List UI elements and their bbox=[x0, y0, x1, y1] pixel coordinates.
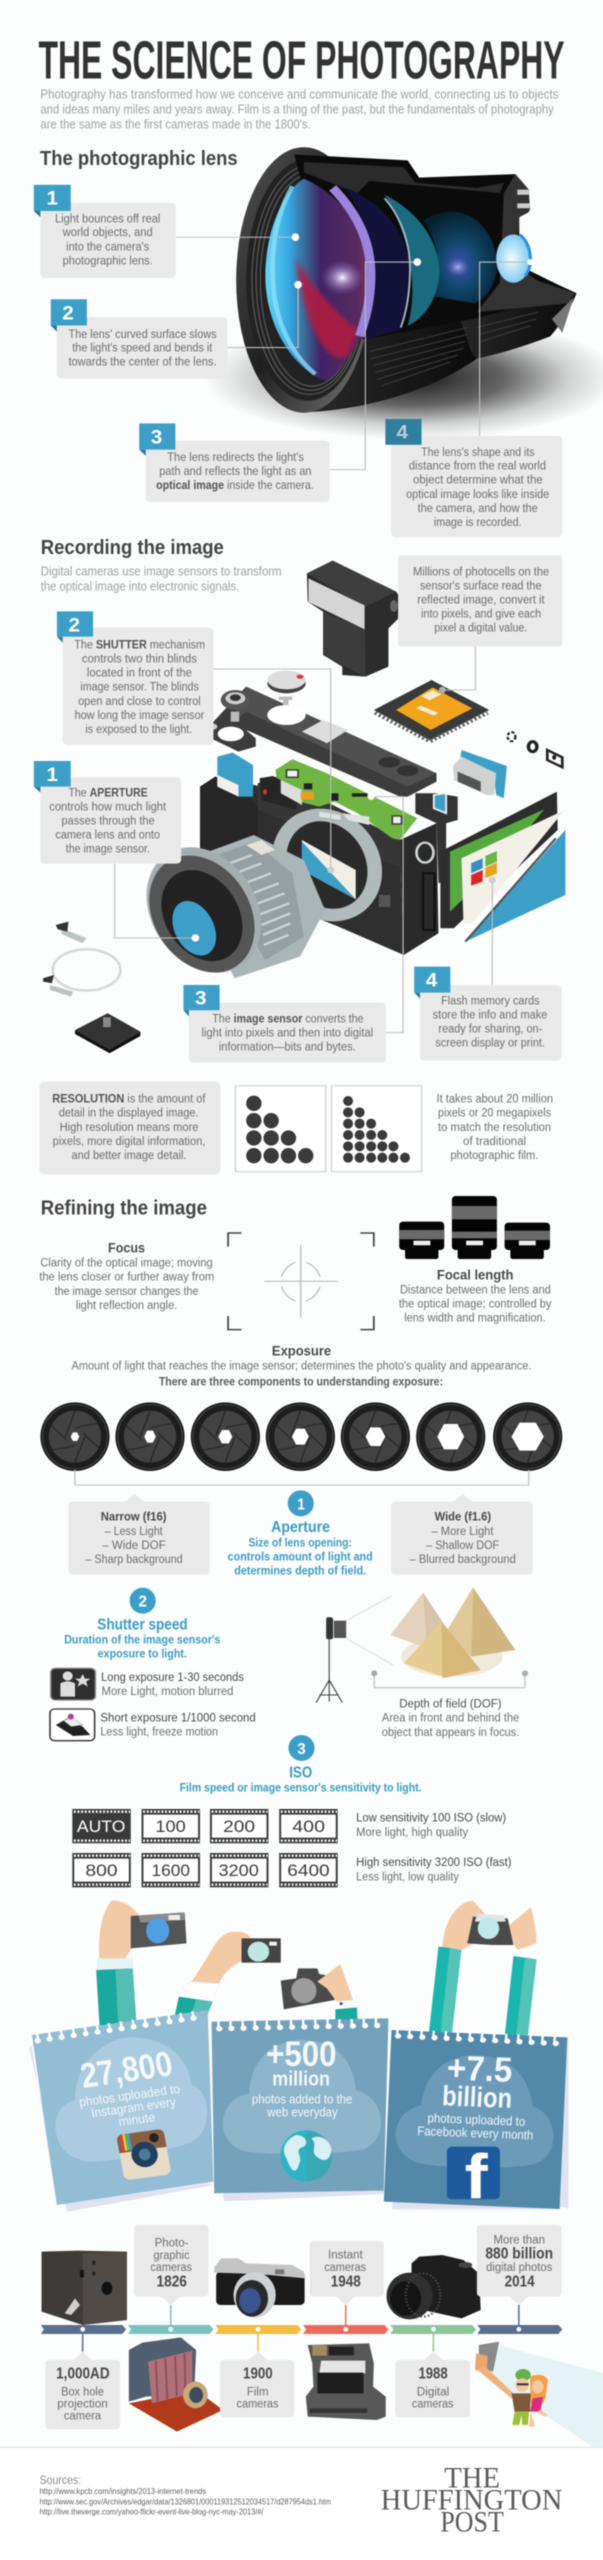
block: ISO definition: ISO bbox=[289, 1764, 312, 1781]
callout: 1900 bbox=[220, 2352, 294, 2417]
recording intro text bbox=[41, 565, 282, 594]
callout: 1826: Photo- bbox=[155, 2236, 188, 2249]
callout 2: shutter: image sensor. The blinds bbox=[80, 680, 199, 693]
chart: ISO film frames: 400 bbox=[292, 1817, 325, 1836]
callout 1: aperture: The APERTURE bbox=[68, 785, 148, 799]
text: megapixels note: pixels or 20 megapixels bbox=[438, 1106, 551, 1119]
callout 1: lens: into the camera's bbox=[66, 239, 150, 253]
marker dots: camera bbox=[192, 793, 496, 942]
panel: facebook statistic: billion bbox=[441, 2081, 513, 2114]
intro text: are the same as the first cameras made in the 1800's. bbox=[40, 116, 311, 131]
callout: 1900: cameras bbox=[237, 2397, 279, 2410]
block: ISO definition: 3 bbox=[297, 1739, 306, 1758]
callout: 1900: Film bbox=[247, 2384, 268, 2398]
callout 2: shutter: how long the image sensor bbox=[75, 708, 205, 722]
text block: focal length: the optical image; controlled by bbox=[399, 1296, 552, 1310]
callout 1: aperture: passes through the bbox=[62, 814, 155, 827]
callout: 1988: 1988 bbox=[418, 2364, 448, 2382]
text: depth of field: object that appears in focus. bbox=[382, 1725, 519, 1739]
lens illustration bbox=[204, 147, 603, 440]
lens shadow bbox=[204, 315, 603, 440]
icon: globe bbox=[280, 2130, 332, 2182]
illustration: hand with camera 1 bbox=[96, 1901, 187, 2033]
callout 1: aperture: 1 bbox=[47, 764, 58, 786]
chart: ISO film frames: 100 bbox=[155, 1817, 186, 1836]
chart: ISO film frames: 200 bbox=[223, 1817, 255, 1836]
icon: circuit board bbox=[260, 759, 417, 840]
panel: wide aperture: – Blurred background bbox=[410, 1552, 516, 1566]
chart: ISO film frames: 6400 bbox=[287, 1861, 330, 1880]
panel: narrow aperture: – Sharp background bbox=[85, 1552, 183, 1566]
panel: wide aperture bbox=[391, 1494, 533, 1574]
icon: image sensor chip bbox=[374, 680, 489, 741]
text: megapixels note: to match the resolution bbox=[438, 1120, 551, 1134]
block: shutter speed definition: Duration of the image sensor's bbox=[64, 1632, 220, 1646]
callout: 1000 AD: projection bbox=[57, 2397, 108, 2410]
panel: web statistic bbox=[212, 2018, 388, 2201]
text: long exposure bbox=[101, 1670, 244, 1698]
text: short exposure bbox=[100, 1711, 256, 1738]
panel: web statistic: +500 bbox=[266, 2035, 337, 2074]
illustration: hand with camera 3 bbox=[281, 1964, 358, 2022]
callout: 1826: cameras bbox=[150, 2260, 192, 2274]
callout 4: flash memory: 4 bbox=[426, 970, 438, 991]
callout: 2014: 2014 bbox=[505, 2273, 535, 2290]
icon: rear screen bbox=[440, 792, 565, 942]
illustration: selfie couple bbox=[475, 2342, 548, 2427]
block: aperture definition: Size of lens opening: bbox=[248, 1535, 352, 1549]
text block: exposure bbox=[72, 1344, 532, 1388]
callout: 2014: digital photos bbox=[486, 2260, 553, 2274]
callout: 1948: Instant bbox=[328, 2247, 363, 2261]
sources: http://www.kpcb.com/insights/2013-internet-trends bbox=[40, 2487, 206, 2496]
heading: recording the image: Recording the image bbox=[41, 535, 224, 559]
block: shutter speed definition: Shutter speed bbox=[97, 1615, 188, 1633]
text: depth of field bbox=[382, 1697, 519, 1739]
connector lines: camera bbox=[115, 647, 492, 1033]
callout 1: aperture: controls how much light bbox=[49, 800, 166, 813]
panel: web statistic: photos added to the bbox=[252, 2092, 352, 2106]
text: low sensitivity: More light, high quality bbox=[356, 1825, 468, 1839]
timeline bar bbox=[41, 2305, 562, 2352]
text: low sensitivity: Low sensitivity 100 ISO (slow) bbox=[356, 1811, 506, 1824]
sources: http://live.theverge.com/yahoo-flickr-event-live-blog-nyc-may-2013/#/ bbox=[40, 2507, 264, 2516]
callout 4: lens: object determine what the bbox=[413, 472, 543, 487]
icon: short exposure bbox=[50, 1709, 95, 1741]
section: camera timeline bbox=[0, 2225, 603, 2560]
panel: resolution definition: High resolution means more bbox=[60, 1120, 198, 1134]
callout: photocells bbox=[398, 555, 562, 647]
callout 2: shutter: open and close to control bbox=[78, 694, 201, 708]
callout: 1000 AD: camera bbox=[64, 2409, 102, 2422]
block: shutter speed definition: 2 bbox=[138, 1592, 147, 1610]
marker dots: lens bbox=[292, 233, 533, 289]
callout: 1948: 1948 bbox=[331, 2273, 361, 2290]
callout 3: lens: The lens redirects the light's bbox=[167, 450, 304, 464]
callout 3: lens: path and reflects the light as an bbox=[159, 463, 312, 478]
panel: resolution definition: and better image detail. bbox=[72, 1148, 187, 1162]
text block: focus: light reflection angle. bbox=[76, 1298, 177, 1312]
callout 1: lens: photographic lens. bbox=[63, 253, 153, 267]
block: aperture definition: determines depth of field. bbox=[234, 1563, 366, 1577]
text: short exposure: Short exposure 1/1000 second bbox=[100, 1711, 256, 1724]
icons: focus and aperture glyphs bbox=[508, 732, 562, 767]
callout: 1988 bbox=[395, 2352, 470, 2417]
text block: exposure: There are three components to understanding exposure: bbox=[159, 1375, 443, 1388]
sources bbox=[40, 2473, 331, 2516]
text block: focus bbox=[39, 1241, 214, 1312]
callout 4: flash memory bbox=[414, 967, 562, 1061]
sources: Sources: bbox=[40, 2473, 81, 2487]
panel: web statistic: web everyday bbox=[266, 2106, 338, 2119]
illustration: two hands with camera bbox=[429, 1901, 537, 2037]
callout 1: lens: 1 bbox=[47, 188, 58, 209]
block: ISO definition bbox=[180, 1735, 422, 1794]
icon: camera lens bbox=[126, 832, 325, 988]
callout: 1826: graphic bbox=[153, 2248, 190, 2262]
callout 2: lens bbox=[51, 299, 227, 379]
block: ISO definition: Film speed or image sensor's sensitivity to light. bbox=[180, 1781, 422, 1794]
icon: rangefinder camera bbox=[214, 2258, 306, 2318]
callout 4: lens: the camera, and how the bbox=[418, 501, 538, 515]
section: resolution and refining bbox=[39, 1082, 553, 1388]
panel: web statistic: million bbox=[272, 2067, 330, 2090]
panel: resolution definition: pixels, more digital information, bbox=[53, 1134, 205, 1148]
block: shutter speed definition bbox=[64, 1588, 220, 1660]
callout 1: aperture bbox=[34, 761, 181, 864]
text: megapixels note bbox=[437, 1092, 553, 1162]
callout 3: lens bbox=[139, 423, 330, 502]
icon: lens mount and sensor bbox=[255, 796, 399, 934]
panel: wide aperture: Wide (f1.6) bbox=[435, 1509, 491, 1523]
chart: aperture series bbox=[40, 1402, 562, 1471]
callout: 1826: 1826 bbox=[157, 2273, 187, 2290]
callout 4: flash memory: Flash memory cards bbox=[441, 994, 540, 1007]
illustration: hand with camera 2 bbox=[173, 1932, 281, 2023]
callout 3: image sensor: 3 bbox=[195, 988, 207, 1009]
callout 4: lens: distance from the real world bbox=[409, 458, 546, 472]
illustration: depth of field pyramids bbox=[316, 1587, 515, 1703]
callout 4: lens: The lens's shape and its bbox=[421, 444, 535, 459]
text: high sensitivity: Less light, low quality bbox=[356, 1869, 459, 1883]
callout: 1948 bbox=[310, 2241, 384, 2305]
text block: focal length: lens width and magnification. bbox=[404, 1311, 546, 1324]
logo: the huffington post: THE bbox=[444, 2461, 500, 2495]
icon: tripod plate bbox=[75, 1013, 140, 1053]
block: aperture definition: Aperture bbox=[271, 1518, 330, 1536]
recording intro text: the optical image into electronic signals. bbox=[41, 580, 239, 594]
callout 3: lens: 3 bbox=[151, 427, 162, 448]
callout 2: shutter: The SHUTTER mechanism bbox=[74, 637, 205, 651]
decoration: selfie light beam bbox=[477, 2345, 603, 2447]
callout 4: flash memory: screen display or print. bbox=[435, 1036, 545, 1049]
chart: low resolution dots bbox=[235, 1086, 326, 1172]
panel: wide aperture: – More Light bbox=[432, 1524, 494, 1538]
callout: photocells: into pixels, and give each bbox=[421, 607, 541, 620]
callout: photocells: pixel a digital value. bbox=[434, 621, 527, 634]
panel: facebook statistic: Facebook every month bbox=[417, 2124, 534, 2142]
callout 4: flash memory: store the info and make bbox=[433, 1008, 547, 1021]
panel: instagram statistic: Instagram every bbox=[90, 2095, 177, 2120]
panel: facebook statistic: photos uploaded to bbox=[427, 2111, 526, 2129]
icon: shutter dials and camera top plate bbox=[202, 671, 437, 797]
icon: focus frame bbox=[228, 1233, 374, 1330]
callout: photocells: sensor's surface read the bbox=[420, 578, 542, 592]
block: aperture definition bbox=[228, 1490, 373, 1577]
text: high sensitivity bbox=[356, 1855, 512, 1883]
callout: 1988: cameras bbox=[412, 2397, 454, 2410]
text: long exposure: More Light, motion blurred bbox=[102, 1684, 233, 1698]
callout 4: lens: 4 bbox=[397, 423, 409, 443]
text: high sensitivity: High sensitivity 3200 ISO (fast) bbox=[356, 1855, 512, 1869]
text block: focus: Clarity of the optical image; moving bbox=[40, 1256, 213, 1269]
callout: 1900: 1900 bbox=[243, 2364, 273, 2382]
callout 2: shutter: located in front of the bbox=[87, 666, 192, 679]
callout: 1000 AD bbox=[45, 2352, 120, 2429]
text block: focal length: Distance between the lens and bbox=[400, 1282, 551, 1296]
section: photo statistics bbox=[29, 1901, 568, 2212]
logo: the huffington post: HUFFINGTON bbox=[381, 2483, 562, 2517]
text: depth of field: Area in front and behind the bbox=[382, 1711, 519, 1724]
panel: narrow aperture: – Less Light bbox=[105, 1524, 163, 1538]
callout 2: lens: 2 bbox=[62, 303, 74, 324]
callout 1: aperture: the image sensor. bbox=[66, 842, 150, 855]
callout: 2014: More than bbox=[493, 2232, 545, 2246]
callout 1: aperture: camera lens and onto bbox=[55, 828, 160, 841]
panel: instagram statistic: 27,800 bbox=[77, 2045, 176, 2096]
panel: resolution definition: detail in the displayed image. bbox=[59, 1106, 198, 1119]
logo: the huffington post: POST bbox=[440, 2506, 504, 2539]
text block: focus: the image sensor changes the bbox=[55, 1284, 198, 1298]
recording intro text: Digital cameras use image sensors to transform bbox=[41, 565, 282, 579]
icon: viewfinder module bbox=[453, 750, 507, 798]
callout 4: lens: image is recorded. bbox=[434, 515, 522, 529]
panel: instagram statistic: minute bbox=[117, 2110, 156, 2129]
footer rule bbox=[0, 2445, 603, 2449]
panel: instagram statistic bbox=[29, 2010, 213, 2212]
callout 4: lens: optical image looks like inside bbox=[406, 487, 549, 501]
text block: focal length bbox=[399, 1267, 552, 1324]
callout: 1988: Digital bbox=[417, 2384, 449, 2398]
callout: 1000 AD: Box hole bbox=[61, 2384, 104, 2398]
heading: refining the image: Refining the image bbox=[41, 1196, 207, 1219]
icon: instant camera bbox=[306, 2343, 386, 2420]
callout 1: lens bbox=[34, 185, 176, 278]
panel: instagram statistic: photos uploaded to bbox=[78, 2082, 181, 2109]
chart: ISO film frames bbox=[72, 1809, 338, 1887]
icon: long exposure bbox=[51, 1668, 95, 1700]
callout 2: lens: the light's speed and bends it bbox=[72, 340, 213, 355]
text block: focus: the lens closer or further away from bbox=[39, 1270, 214, 1283]
panel: facebook statistic: +7.5 bbox=[446, 2049, 513, 2090]
callout 2: shutter: is exposed to the light. bbox=[85, 722, 192, 736]
callout 3: lens: optical image inside the camera. bbox=[156, 478, 314, 492]
panel: narrow aperture bbox=[68, 1494, 210, 1574]
text: megapixels note: photographic film. bbox=[450, 1148, 538, 1162]
bracket: depth of field bbox=[371, 1670, 528, 1688]
icon: digital SLR bbox=[387, 2255, 481, 2319]
callout 3: image sensor: The image sensor converts the bbox=[212, 1011, 363, 1025]
icon: instagram bbox=[116, 2129, 172, 2181]
text block: focal length: Focal length bbox=[437, 1267, 513, 1283]
text: low sensitivity bbox=[356, 1811, 506, 1839]
text: depth of field: Depth of field (DOF) bbox=[399, 1697, 502, 1710]
icon: bellows camera bbox=[129, 2337, 223, 2432]
block: shutter speed definition: exposure to light. bbox=[98, 1647, 187, 1660]
panel: wide aperture: – Shallow DOF bbox=[426, 1538, 499, 1552]
callout 1: lens: Light bounces off real bbox=[55, 211, 160, 225]
icon: usb cable bbox=[43, 922, 120, 997]
callout 2: lens: towards the center of the lens. bbox=[68, 354, 217, 368]
panel: narrow aperture: Narrow (f16) bbox=[101, 1509, 167, 1523]
text block: focus: Focus bbox=[108, 1241, 145, 1256]
callout 2: lens: The lens' curved surface slows bbox=[68, 327, 217, 341]
section: shutter examples and ISO bbox=[50, 1668, 528, 1887]
icon: camera body bbox=[200, 753, 458, 955]
section: recording the image bbox=[34, 535, 565, 1063]
icon: facebook: f bbox=[465, 2142, 488, 2212]
block: aperture definition: 1 bbox=[297, 1495, 305, 1513]
text: megapixels note: It takes about 20 million bbox=[437, 1092, 553, 1105]
heading: the photographic lens: The photographic lens bbox=[40, 148, 238, 170]
panel: narrow aperture: – Wide DOF bbox=[102, 1538, 166, 1552]
icon: flash bbox=[307, 561, 402, 677]
connector lines: lens bbox=[176, 237, 531, 470]
icon: facebook bbox=[447, 2142, 500, 2212]
icon: box camera bbox=[42, 2251, 127, 2325]
text: megapixels note: of traditional bbox=[463, 1134, 526, 1148]
intro text bbox=[40, 86, 558, 131]
callout 4: flash memory: ready for sharing, on- bbox=[438, 1022, 542, 1035]
text block: exposure: Exposure bbox=[272, 1344, 331, 1359]
bracket: aperture range bbox=[75, 1470, 529, 1485]
panel: facebook statistic bbox=[384, 2030, 568, 2212]
text: short exposure: Less light, freeze motion bbox=[100, 1725, 218, 1738]
callout: photocells: Millions of photocells on the bbox=[413, 564, 549, 578]
logo: the huffington post bbox=[381, 2461, 562, 2539]
callout 3: image sensor bbox=[183, 985, 386, 1063]
sources: http://www.sec.gov/Archives/edgar/data/1326801/000119312512034517/d287954ds1.htm bbox=[40, 2497, 331, 2506]
panel: resolution definition: RESOLUTION is the amount of bbox=[52, 1092, 206, 1105]
chart: ISO film frames: 800 bbox=[85, 1861, 118, 1880]
callout 3: image sensor: light into pixels and then into digital bbox=[202, 1026, 373, 1039]
callout 2: shutter bbox=[57, 611, 213, 745]
panel: resolution definition bbox=[40, 1082, 220, 1174]
text: long exposure: Long exposure 1-30 seconds bbox=[101, 1670, 244, 1684]
callout: photocells: reflected image, convert it bbox=[417, 592, 545, 606]
section: exposure bbox=[40, 1402, 562, 1703]
block: aperture definition: controls amount of light and bbox=[228, 1549, 373, 1563]
callout 1: lens: world objects, and bbox=[62, 225, 153, 239]
chart: high resolution dots bbox=[332, 1086, 422, 1172]
callout 2: shutter: 2 bbox=[68, 615, 80, 636]
callout: 2014: 880 billion bbox=[485, 2244, 553, 2262]
callout 3: image sensor: information—bits and bytes. bbox=[219, 1040, 356, 1053]
callout 4: lens bbox=[385, 419, 562, 537]
icon: lenses of three focal lengths bbox=[399, 1196, 550, 1259]
callout: 2014 bbox=[477, 2225, 562, 2305]
callout: 1948: cameras bbox=[324, 2260, 366, 2274]
section: header and lens bbox=[34, 30, 603, 537]
chart: ISO film frames: 1600 bbox=[152, 1861, 190, 1880]
footer panel bbox=[0, 2447, 603, 2560]
chart: ISO film frames: AUTO bbox=[77, 1817, 125, 1836]
callout: 1000 AD: 1,000AD bbox=[56, 2364, 110, 2382]
callout 2: shutter: controls two thin blinds bbox=[82, 652, 197, 665]
chart: ISO film frames: 3200 bbox=[218, 1861, 259, 1880]
callout: 1826 bbox=[134, 2225, 208, 2305]
